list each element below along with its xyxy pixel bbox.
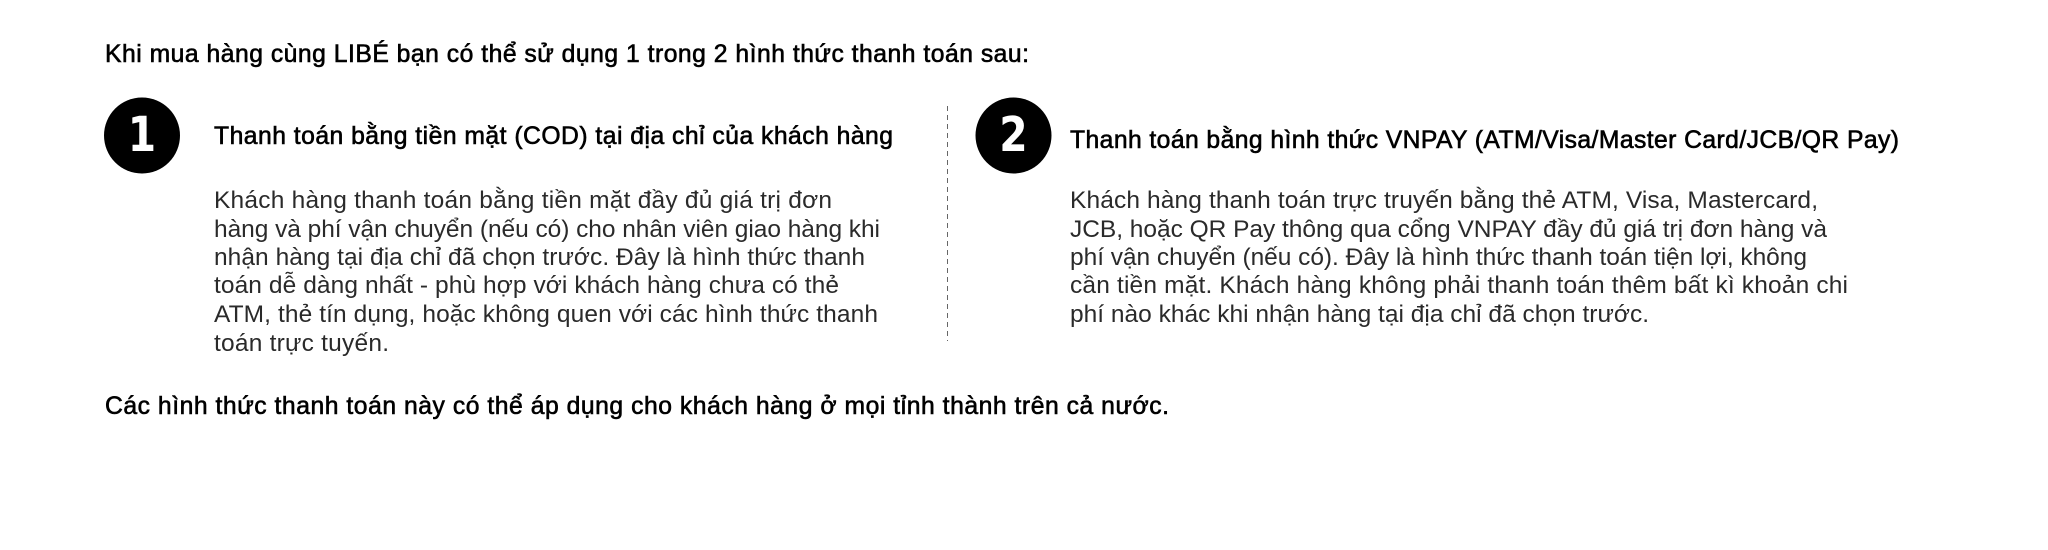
text block: cash on delivery description: toán dễ dàng nhất - phù hợp với khách hàng chưa có thẻ bbox=[214, 272, 839, 299]
text block: VNPAY description: phí vận chuyển (nếu có). Đây là hình thức thanh toán tiện lợi, không bbox=[1070, 244, 1807, 271]
text block: VNPAY description: JCB, hoặc QR Pay thông qua cổng VNPAY đầy đủ giá trị đơn hàng và bbox=[1070, 216, 1827, 243]
text block: cash on delivery description bbox=[214, 187, 880, 357]
text block: VNPAY description: cần tiền mặt. Khách hàng không phải thanh toán thêm bất kì khoản chi bbox=[1070, 272, 1848, 299]
icon: number 1 badge: 1 bbox=[128, 107, 156, 163]
icon: number 2 badge bbox=[976, 98, 1052, 174]
title: Khi mua hàng cùng LIBÉ bạn có thể sử dụng 1 trong 2 hình thức thanh toán sau: bbox=[105, 41, 1029, 68]
heading: VNPAY payment: Thanh toán bằng hình thức VNPAY (ATM/Visa/Master Card/JCB/QR Pay) bbox=[1070, 127, 1899, 154]
panel: cash on delivery bbox=[104, 98, 893, 357]
panel: VNPAY payment bbox=[976, 98, 1899, 328]
text block: cash on delivery description: nhận hàng tại địa chỉ đã chọn trước. Đây là hình thức thanh bbox=[214, 244, 865, 271]
footer note: Các hình thức thanh toán này có thể áp dụng cho khách hàng ở mọi tỉnh thành trên cả nước. bbox=[105, 393, 1169, 420]
icon: number 1 badge bbox=[104, 98, 180, 174]
text block: cash on delivery description: Khách hàng thanh toán bằng tiền mặt đầy đủ giá trị đơn bbox=[214, 187, 832, 214]
text block: cash on delivery description: ATM, thẻ tín dụng, hoặc không quen với các hình thức thanh bbox=[214, 301, 878, 328]
icon: number 2 badge: 2 bbox=[999, 107, 1028, 163]
text block: VNPAY description: Khách hàng thanh toán trực truyến bằng thẻ ATM, Visa, Mastercard, bbox=[1070, 187, 1818, 214]
text block: VNPAY description bbox=[1070, 187, 1848, 328]
text block: cash on delivery description: hàng và phí vận chuyển (nếu có) cho nhân viên giao hàng khi bbox=[214, 216, 880, 243]
text block: cash on delivery description: toán trực tuyến. bbox=[214, 330, 389, 357]
heading: cash on delivery: Thanh toán bằng tiền mặt (COD) tại địa chỉ của khách hàng bbox=[214, 123, 893, 150]
text block: VNPAY description: phí nào khác khi nhận hàng tại địa chỉ đã chọn trước. bbox=[1070, 301, 1649, 328]
